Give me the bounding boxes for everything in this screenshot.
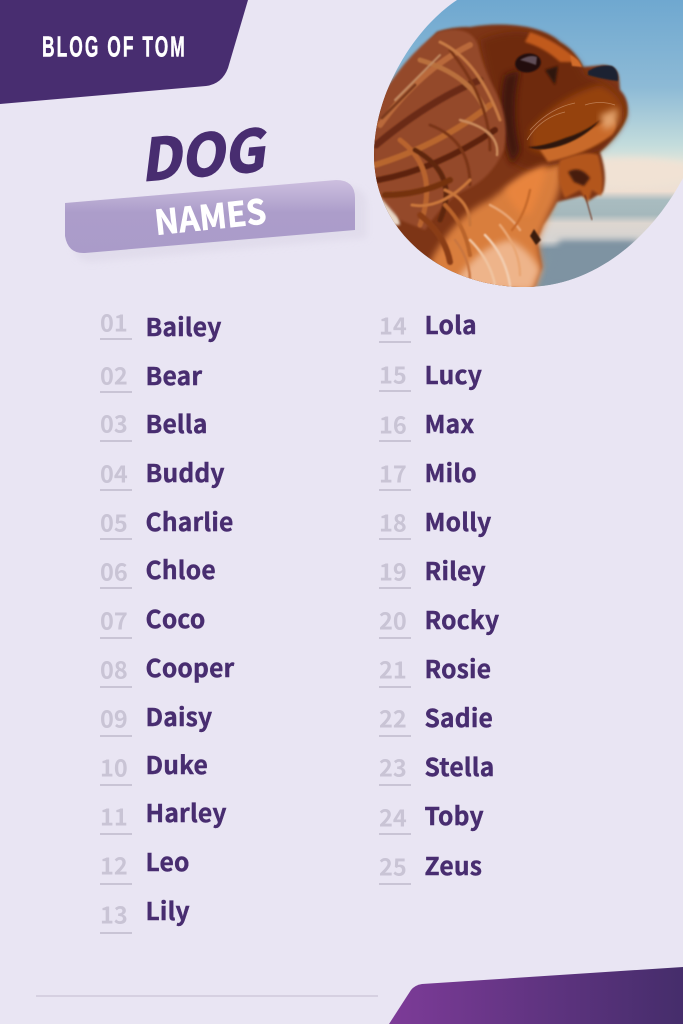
item 24: 24 — [379, 800, 407, 834]
item 01 — [100, 304, 222, 344]
item 19 — [379, 552, 486, 588]
item 01: 01 — [100, 304, 128, 338]
eye — [514, 52, 542, 74]
dog body — [360, 24, 628, 292]
item 05 — [100, 503, 234, 539]
item 24: Toby — [424, 797, 484, 833]
item 08: Cooper — [146, 649, 235, 685]
item 25: 25 — [379, 848, 407, 882]
item 15 — [379, 356, 482, 392]
item 09 — [100, 698, 212, 736]
item 02 — [100, 357, 202, 393]
item 04: 04 — [100, 456, 128, 490]
title: DOG: DOG — [140, 103, 274, 198]
item 05: Charlie — [146, 503, 234, 539]
dark neck — [501, 70, 520, 165]
photo: dog in blob mask — [360, 0, 683, 292]
item 22: 22 — [379, 700, 407, 734]
head — [480, 31, 625, 170]
item 17: Milo — [424, 454, 477, 490]
item 20: 20 — [379, 602, 407, 636]
item 19: 19 — [379, 554, 407, 588]
item 20 — [379, 601, 499, 638]
item 11: 11 — [100, 798, 128, 832]
mouth — [528, 120, 600, 149]
item 25 — [379, 847, 482, 884]
item 18 — [379, 503, 492, 539]
subtitle: NAMES: NAMES — [152, 185, 268, 245]
item 14: 14 — [379, 308, 407, 342]
item 19: Riley — [424, 552, 486, 588]
list: names 01 to 13 — [100, 304, 235, 933]
item 21: 21 — [379, 652, 407, 686]
item 02: 02 — [100, 358, 128, 392]
item 21 — [379, 650, 491, 687]
item 16: 16 — [379, 406, 407, 440]
item 08: 08 — [100, 652, 128, 686]
item 06 — [100, 551, 216, 588]
item 23: Stella — [424, 748, 494, 784]
item 03: Bella — [146, 405, 208, 441]
item 18: 18 — [379, 504, 407, 538]
item 23: 23 — [379, 750, 407, 784]
header banner — [0, 0, 248, 104]
item 18: Molly — [424, 503, 492, 539]
item 08 — [100, 649, 235, 687]
item 23 — [379, 748, 494, 785]
item 11: Harley — [146, 794, 227, 830]
item 07 — [100, 600, 205, 638]
throat tuft — [558, 153, 602, 203]
subtitle band — [65, 180, 367, 262]
item 22 — [379, 699, 493, 736]
item 13: Lily — [146, 892, 190, 928]
item 13 — [100, 892, 190, 933]
item 21: Rosie — [424, 650, 491, 686]
item 17 — [379, 454, 477, 490]
item 14: Lola — [424, 306, 477, 342]
item 15: Lucy — [424, 356, 482, 392]
item 22: Sadie — [424, 699, 493, 735]
item 09: Daisy — [146, 698, 212, 734]
chest strands — [455, 190, 530, 285]
brand name: BLOG OF TOM — [42, 31, 185, 64]
item 11 — [100, 794, 227, 834]
nose — [588, 66, 618, 81]
item 16: Max — [424, 405, 474, 441]
item 15: 15 — [379, 356, 407, 390]
item 13: 13 — [100, 896, 128, 930]
chest fur — [430, 160, 561, 292]
item 16 — [379, 405, 474, 441]
item 10 — [100, 746, 208, 785]
item 03: 03 — [100, 406, 128, 440]
item 10: Duke — [146, 746, 208, 782]
collar — [530, 229, 541, 245]
item 02: Bear — [146, 357, 202, 393]
item 12: Leo — [146, 843, 190, 879]
list: names 14 to 25 — [379, 306, 499, 884]
item 09: 09 — [100, 700, 128, 734]
item 04: Buddy — [146, 454, 225, 490]
item 06: Chloe — [146, 551, 216, 587]
ear — [374, 30, 506, 230]
item 07: Coco — [146, 600, 205, 636]
whiskers — [527, 102, 615, 140]
muzzle — [530, 85, 624, 154]
item 04 — [100, 454, 225, 490]
item 24 — [379, 797, 484, 834]
item 17: 17 — [379, 456, 407, 490]
item 07: 07 — [100, 602, 128, 636]
item 14 — [379, 306, 477, 342]
item 25: Zeus — [424, 847, 482, 883]
item 12: 12 — [100, 848, 128, 882]
item 01: Bailey — [146, 308, 222, 344]
item 12 — [100, 843, 190, 884]
footer banner — [389, 967, 683, 1024]
item 20: Rocky — [424, 601, 499, 637]
item 06: 06 — [100, 554, 128, 588]
item 05: 05 — [100, 504, 128, 538]
item 10: 10 — [100, 750, 128, 784]
item 03 — [100, 405, 208, 441]
